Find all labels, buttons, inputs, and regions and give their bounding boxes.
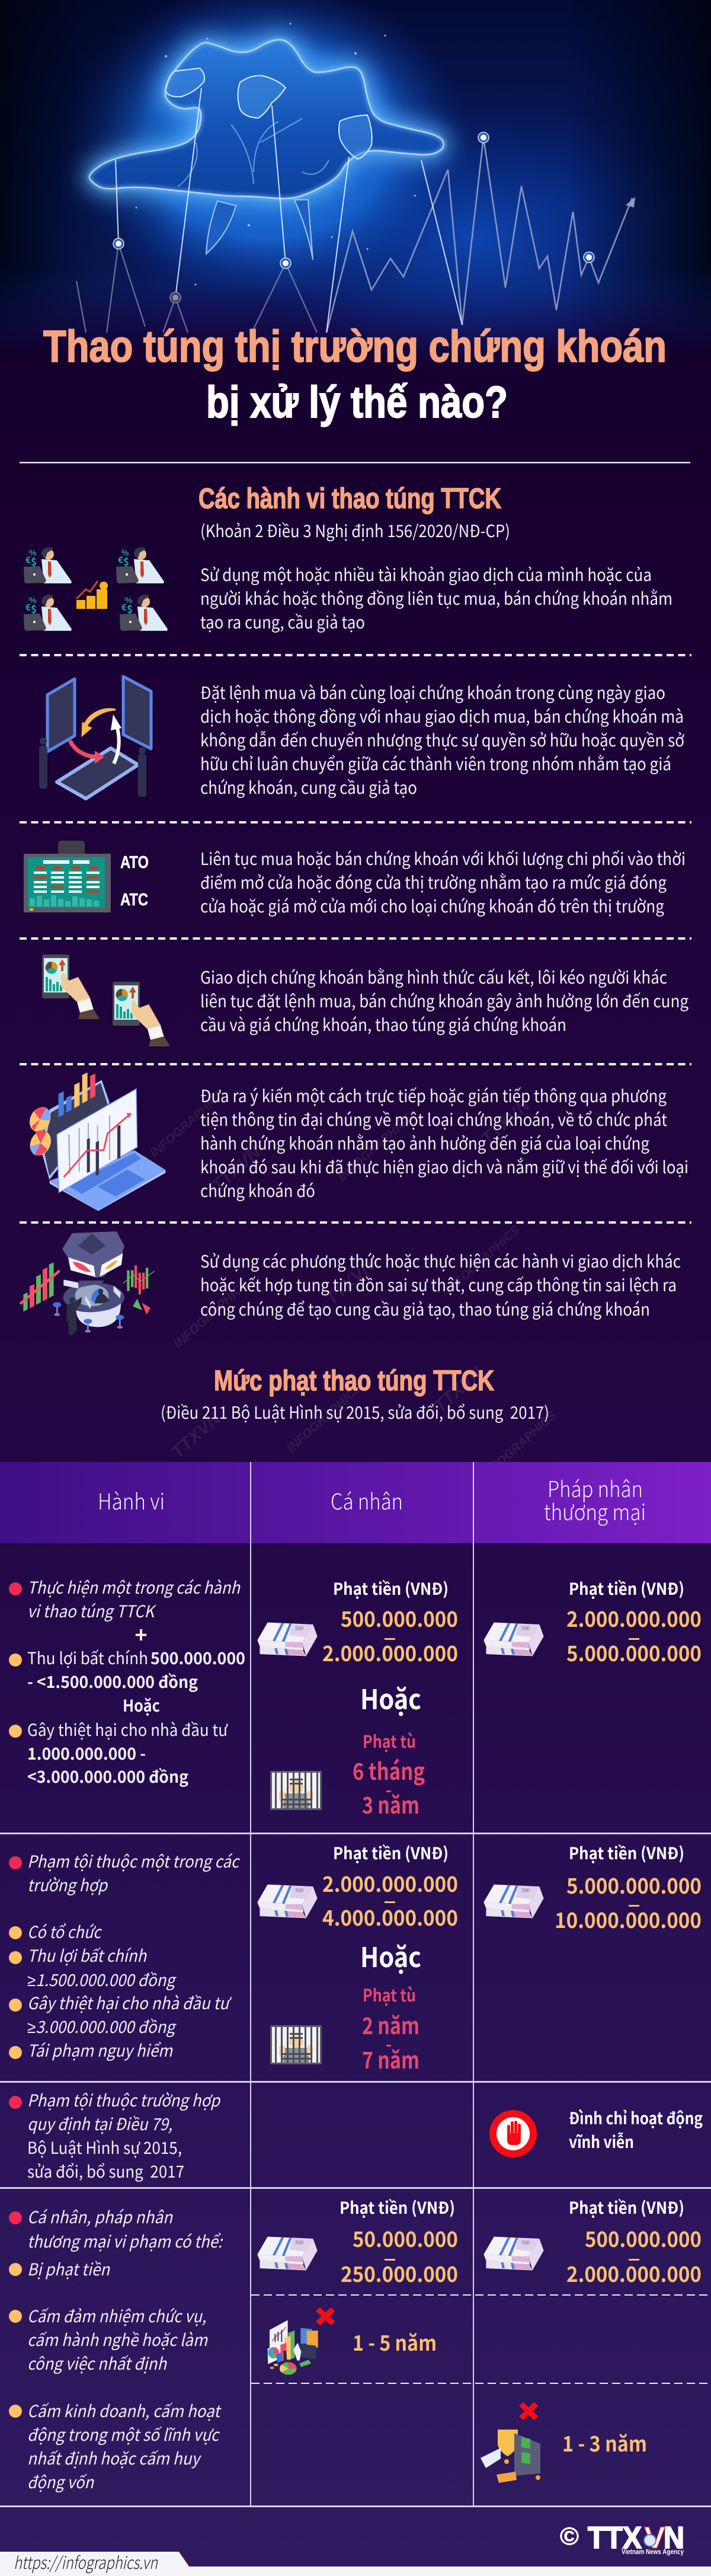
row 2: behaviour xyxy=(9,1849,241,2062)
row 2: corporate penalty: 10.000.000.000 xyxy=(555,1904,702,1935)
table header: thương mại xyxy=(544,1495,646,1527)
row 4: corporate penalties xyxy=(481,2195,702,2483)
row 2: individual penalty: 2 năm xyxy=(362,2008,419,2041)
row 2: individual penalty: 2.000.000.000 xyxy=(322,1868,458,1898)
text xyxy=(200,1249,681,1321)
row 1: individual penalty: Phạt tiền (VNĐ) xyxy=(333,1576,449,1600)
text: người khác hoặc thông đồng liên tục mua, bán chứng khoán nhằm xyxy=(200,586,672,610)
row 3: corporate penalty xyxy=(489,2106,703,2157)
row 4: behaviour: động vốn xyxy=(27,2470,95,2494)
table header xyxy=(0,1462,711,1543)
row 1: behaviour: Thực hiện một trong các hành xyxy=(27,1575,241,1599)
text: chứng khoán đó xyxy=(200,1178,315,1202)
icon: jail xyxy=(270,1771,322,1810)
text: hoặc kết hợp tung tin đồn sai sự thật, cung cấp thông tin sai lệch ra xyxy=(200,1272,677,1297)
row 3: behaviour: Phạm tội thuộc trường hợp xyxy=(27,2088,221,2112)
row 3: behaviour: quy định tại Điều 79, xyxy=(27,2112,172,2136)
icon: banned business xyxy=(481,2430,540,2483)
panel: behaviour 6 xyxy=(20,1231,681,1336)
row 1: corporate penalty: 5.000.000.000 xyxy=(566,1637,702,1668)
row 1: behaviour: Gây thiệt hại cho nhà đầu tư xyxy=(27,1718,228,1741)
text: cầu và giá chứng khoán, thao túng giá chứng khoán xyxy=(200,1012,566,1036)
row 4: behaviour: thương mại vi phạm có thể: xyxy=(27,2229,223,2253)
row 4: behaviour: công việc nhất định xyxy=(27,2351,168,2375)
heading: Các hành vi thao túng TTCK xyxy=(198,483,510,542)
watermarks: INFOGRAPHICS xyxy=(443,1223,523,1297)
row 2: individual penalty: 4.000.000.000 xyxy=(322,1901,458,1932)
panel: behaviour 2 xyxy=(39,676,684,799)
watermarks: TTXVN xyxy=(478,1095,534,1149)
row 3: corporate penalty: vĩnh viễn xyxy=(569,2130,634,2153)
watermarks xyxy=(148,1087,559,1483)
row 2: corporate penalty: 5.000.000.000 xyxy=(566,1869,702,1900)
text: cửa hoặc giá mở cửa mới cho loại chứng khoán đó trên thị trường xyxy=(200,893,664,918)
icon: money xyxy=(257,2237,318,2270)
row 2: individual penalty: 7 năm xyxy=(362,2042,419,2076)
watermarks: TTXVN xyxy=(208,1142,265,1196)
watermarks: INFOGRAPHICS xyxy=(284,1381,364,1455)
row 2: individual penalty: Phạt tiền (VNĐ) xyxy=(333,1841,449,1865)
row 2: corporate penalty xyxy=(483,1841,702,1935)
table header: Pháp nhân xyxy=(547,1471,643,1504)
title: bị xử lý thế nào? xyxy=(206,377,508,427)
row 1: behaviour xyxy=(9,1575,245,1788)
icon: ATO ATC board: ATO xyxy=(120,853,149,872)
heading: Các hành vi thao túng TTCK: Các hành vi thao túng TTCK xyxy=(198,483,501,515)
row 2: behaviour: ≥1.500.000.000 đồng xyxy=(27,1968,177,1991)
row 2: behaviour: ≥3.000.000.000 đồng xyxy=(27,2015,177,2038)
row 1: corporate penalty xyxy=(483,1576,702,1668)
row 4: individual penalties xyxy=(257,2195,458,2375)
row 4: corporate penalties: 2.000.000.000 xyxy=(566,2258,702,2288)
text: tạo ra cung, cầu giả tạo xyxy=(200,609,365,634)
header illustration: puppet hand over stock chart xyxy=(0,0,711,374)
icon: money xyxy=(257,1885,318,1918)
row 1: behaviour: - <1.500.000.000 đồng xyxy=(27,1670,198,1693)
row 2: individual penalty: Phạt tù xyxy=(363,1982,416,2007)
row 4: behaviour: Cấm kinh doanh, cấm hoạt xyxy=(27,2399,222,2422)
text xyxy=(200,846,686,918)
table header: Hành vi xyxy=(98,1484,165,1516)
watermarks: TTXVN xyxy=(322,1255,379,1309)
icon: red cross xyxy=(521,2404,536,2418)
row 3: behaviour xyxy=(9,2088,221,2183)
panel: behaviour 1 xyxy=(24,547,672,634)
row 4: individual penalties: 50.000.000 xyxy=(353,2223,458,2253)
row 4: individual penalties: 250.000.000 xyxy=(341,2258,458,2288)
row 2: behaviour: Gây thiệt hại cho nhà đầu tư xyxy=(27,1991,232,2015)
row 2: behaviour: Có tổ chức xyxy=(27,1920,102,1943)
row 2: behaviour: Phạm tội thuộc một trong các xyxy=(27,1849,241,1873)
row 1: behaviour: 1.000.000.000 - xyxy=(27,1741,146,1765)
row 1: individual penalty xyxy=(257,1576,458,1821)
table header: Cá nhân xyxy=(331,1484,403,1516)
icon: stop hand xyxy=(489,2110,537,2157)
text xyxy=(200,965,688,1036)
row 1: corporate penalty: Phạt tiền (VNĐ) xyxy=(569,1576,684,1600)
watermarks: INFOGRAPHICS xyxy=(335,1110,415,1185)
watermarks: INFOGRAPHICS xyxy=(148,1087,228,1161)
text: chứng khoán, cung cầu giả tạo xyxy=(200,775,417,799)
icon: ATO ATC board xyxy=(24,841,149,912)
row 2: corporate penalty: Phạt tiền (VNĐ) xyxy=(569,1841,684,1865)
row 1: behaviour: Thu lợi bất chính xyxy=(27,1646,148,1670)
icon: money xyxy=(483,1885,544,1918)
row 2: behaviour: trường hợp xyxy=(27,1873,108,1897)
row 4: corporate penalties: 500.000.000 xyxy=(585,2223,702,2253)
row 2: behaviour: Tái phạm nguy hiểm xyxy=(27,2038,173,2062)
icon: phones exchanging xyxy=(39,676,151,799)
panel: behaviour 4 xyxy=(42,955,688,1046)
row 3: behaviour: Bộ Luật Hình sự 2015, xyxy=(27,2136,182,2159)
heading: Mức phạt thao túng TTCK: Mức phạt thao túng TTCK xyxy=(214,1365,494,1397)
title xyxy=(43,321,667,427)
text: Giao dịch chứng khoán bằng hình thức cấu kết, lôi kéo người khác xyxy=(200,965,667,989)
row 1: behaviour: 500.000.000 xyxy=(150,1646,245,1670)
row 4: behaviour: Cấm đảm nhiệm chức vụ, xyxy=(27,2304,206,2328)
panel: behaviour 3 xyxy=(24,841,686,918)
icon: money xyxy=(483,1623,544,1656)
text: hữu chỉ luân chuyển giữa các thành viên trong nhóm nhằm tạo giá xyxy=(200,751,671,775)
watermarks: TTXVN xyxy=(168,1408,225,1462)
text: Đặt lệnh mua và bán cùng loại chứng khoán trong cùng ngày giao xyxy=(200,680,665,704)
watermarks: INFOGRAPHICS xyxy=(171,1277,251,1351)
text: điểm mở cửa hoặc đóng cửa thị trường nhằm tạo ra mức giá đóng xyxy=(200,870,667,894)
text xyxy=(200,1083,688,1202)
row 1: behaviour: vi thao túng TTCK xyxy=(27,1599,157,1623)
icon: money xyxy=(257,1623,318,1656)
row 4: behaviour: cấm hành nghề hoặc làm xyxy=(27,2328,208,2351)
row 1: individual penalty: 3 năm xyxy=(362,1787,419,1821)
icon: laptop with charts xyxy=(25,1072,165,1211)
row 4: individual penalties: 1 - 5 năm xyxy=(353,2326,437,2357)
icon: trading desk with charts xyxy=(20,1231,155,1336)
icon: ATO ATC board: ATC xyxy=(120,890,148,909)
icon: hands on phones xyxy=(42,955,170,1046)
row 4: behaviour: nhất định hoặc cấm huy xyxy=(27,2446,202,2470)
text: Sử dụng một hoặc nhiều tài khoản giao dịch của mình hoặc của xyxy=(200,562,652,586)
row 4: behaviour: động trong một số lĩnh vực xyxy=(27,2422,220,2446)
watermarks: INFOGRAPHICS xyxy=(479,1409,559,1483)
footer: website tab xyxy=(0,2549,711,2576)
row 2: individual penalty xyxy=(257,1841,458,2076)
row 1: behaviour: <3.000.000.000 đồng xyxy=(27,1764,188,1788)
icon: jail xyxy=(270,2025,322,2064)
row 1: individual penalty: Hoặc xyxy=(360,1678,421,1718)
row 4: behaviour: Cá nhân, pháp nhân xyxy=(27,2205,174,2229)
row 1: individual penalty: 6 tháng xyxy=(353,1754,425,1787)
icon: money xyxy=(483,2237,544,2270)
row 1: behaviour: + xyxy=(134,1619,148,1649)
heading: Các hành vi thao túng TTCK: (Khoản 2 Điều 3 Nghị định 156/2020/NĐ-CP) xyxy=(200,518,510,542)
logo: TTXVN: TTX xyxy=(588,2521,642,2555)
row 2: behaviour: Thu lợi bất chính xyxy=(27,1943,148,1967)
row 4: behaviour: Bị phạt tiền xyxy=(27,2257,111,2281)
logo: TTXVN: V xyxy=(644,2521,665,2555)
footer: website tab: https://infographics.vn xyxy=(14,2549,158,2574)
icon: traders with rising coins xyxy=(24,547,168,631)
row 1: corporate penalty: 2.000.000.000 xyxy=(566,1603,702,1633)
logo: TTXVN xyxy=(560,2521,684,2556)
panel: behaviour 5 xyxy=(25,1072,688,1211)
row 2: individual penalty: Hoặc xyxy=(360,1936,421,1975)
row 4: behaviour xyxy=(9,2205,223,2494)
row 1: behaviour: Hoặc xyxy=(123,1693,160,1717)
text xyxy=(200,680,684,799)
text: công chúng để tạo cung cầu giả tạo, thao túng giá chứng khoán xyxy=(200,1297,650,1321)
row 4: corporate penalties: 1 - 3 năm xyxy=(562,2427,647,2458)
row 3: behaviour: sửa đổi, bổ sung 2017 xyxy=(27,2159,184,2183)
row 1: individual penalty: 500.000.000 xyxy=(341,1603,458,1633)
logo: TTXVN: © xyxy=(560,2522,579,2550)
row 4: individual penalties: Phạt tiền (VNĐ) xyxy=(340,2195,455,2219)
row 4: corporate penalties: Phạt tiền (VNĐ) xyxy=(569,2195,684,2219)
icon: banned profession xyxy=(268,2320,318,2375)
logo: TTXVN: Vietnam News Agency xyxy=(622,2548,684,2556)
text xyxy=(200,562,672,634)
text: hành chứng khoán nhằm tạo ảnh hưởng đến giá của loại chứng xyxy=(200,1131,649,1155)
heading: Mức phạt thao túng TTCK: (Điều 211 Bộ Luật Hình sự 2015, sửa đổi, bổ sung 2017) xyxy=(161,1400,549,1424)
icon: red cross xyxy=(318,2309,333,2323)
watermarks: TTXVN xyxy=(430,1362,487,1416)
logo: TTXVN: N xyxy=(664,2521,684,2555)
row 1: individual penalty: Phạt tù xyxy=(363,1728,416,1753)
text: Đưa ra ý kiến một cách trực tiếp hoặc gián tiếp thông qua phương xyxy=(200,1083,667,1107)
row 1: individual penalty: 2.000.000.000 xyxy=(322,1637,458,1668)
heading: Mức phạt thao túng TTCK xyxy=(161,1365,549,1424)
text: tiện thông tin đại chúng về một loại chứng khoán, về tổ chức phát xyxy=(200,1107,667,1131)
